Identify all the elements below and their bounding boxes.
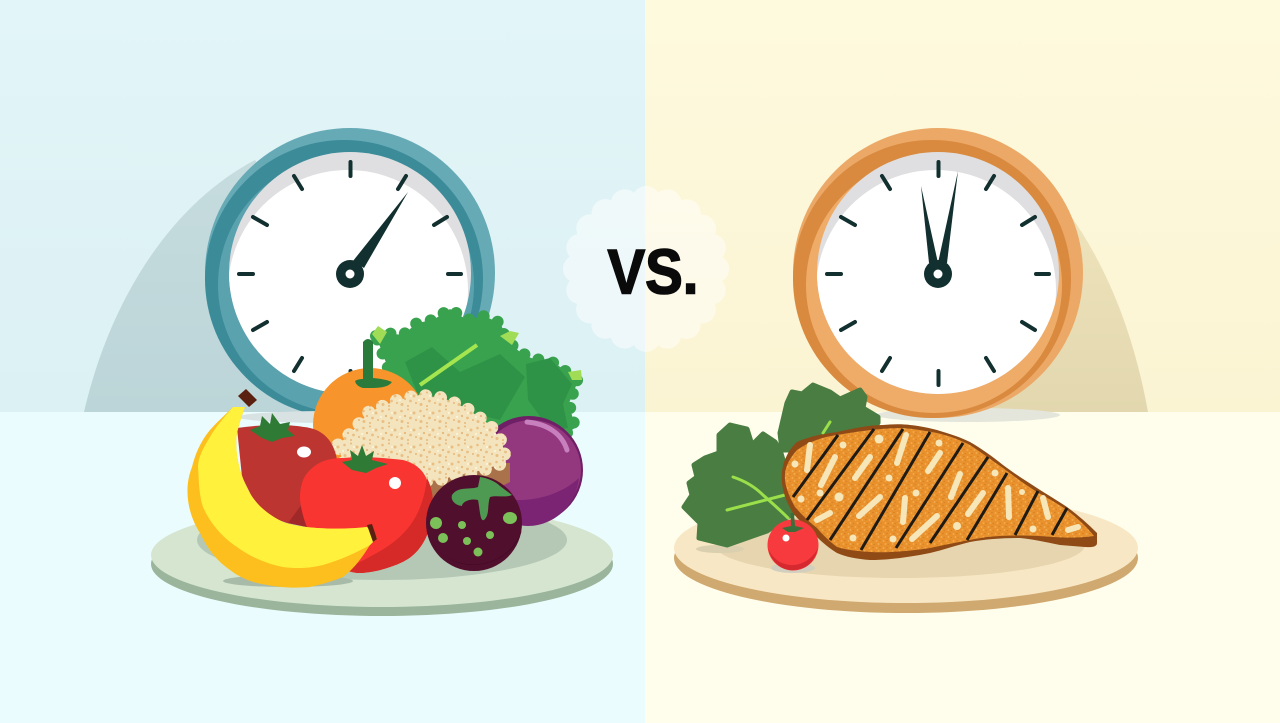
icon: leaf veins — [727, 422, 830, 518]
icon: banana — [187, 389, 377, 588]
icon: dark red apple — [237, 413, 338, 530]
icon: cherry tomato — [768, 513, 818, 570]
vs badge — [577, 200, 715, 338]
plate: left with healthy foods — [151, 309, 613, 616]
icon: purple plum — [475, 416, 583, 526]
icon: greens garnish — [684, 385, 878, 545]
icon: dark berry fruit — [426, 475, 522, 571]
clock: left, hand near one o'clock — [205, 128, 495, 418]
icon: grains mound with bowl — [338, 395, 510, 500]
vs label: VS. — [608, 238, 698, 308]
plate: right with grilled chicken — [674, 385, 1138, 613]
icon: leafy greens — [372, 309, 582, 440]
icon: red tomato — [300, 445, 433, 573]
clock: right, hands at twelve — [793, 128, 1083, 422]
clock shadow: left — [84, 160, 420, 412]
panel: right background — [645, 0, 1280, 723]
clock shadow: right — [960, 212, 1148, 412]
panel: left background — [0, 0, 645, 723]
icon: orange — [313, 339, 427, 482]
icon: grilled chicken — [782, 424, 1097, 560]
